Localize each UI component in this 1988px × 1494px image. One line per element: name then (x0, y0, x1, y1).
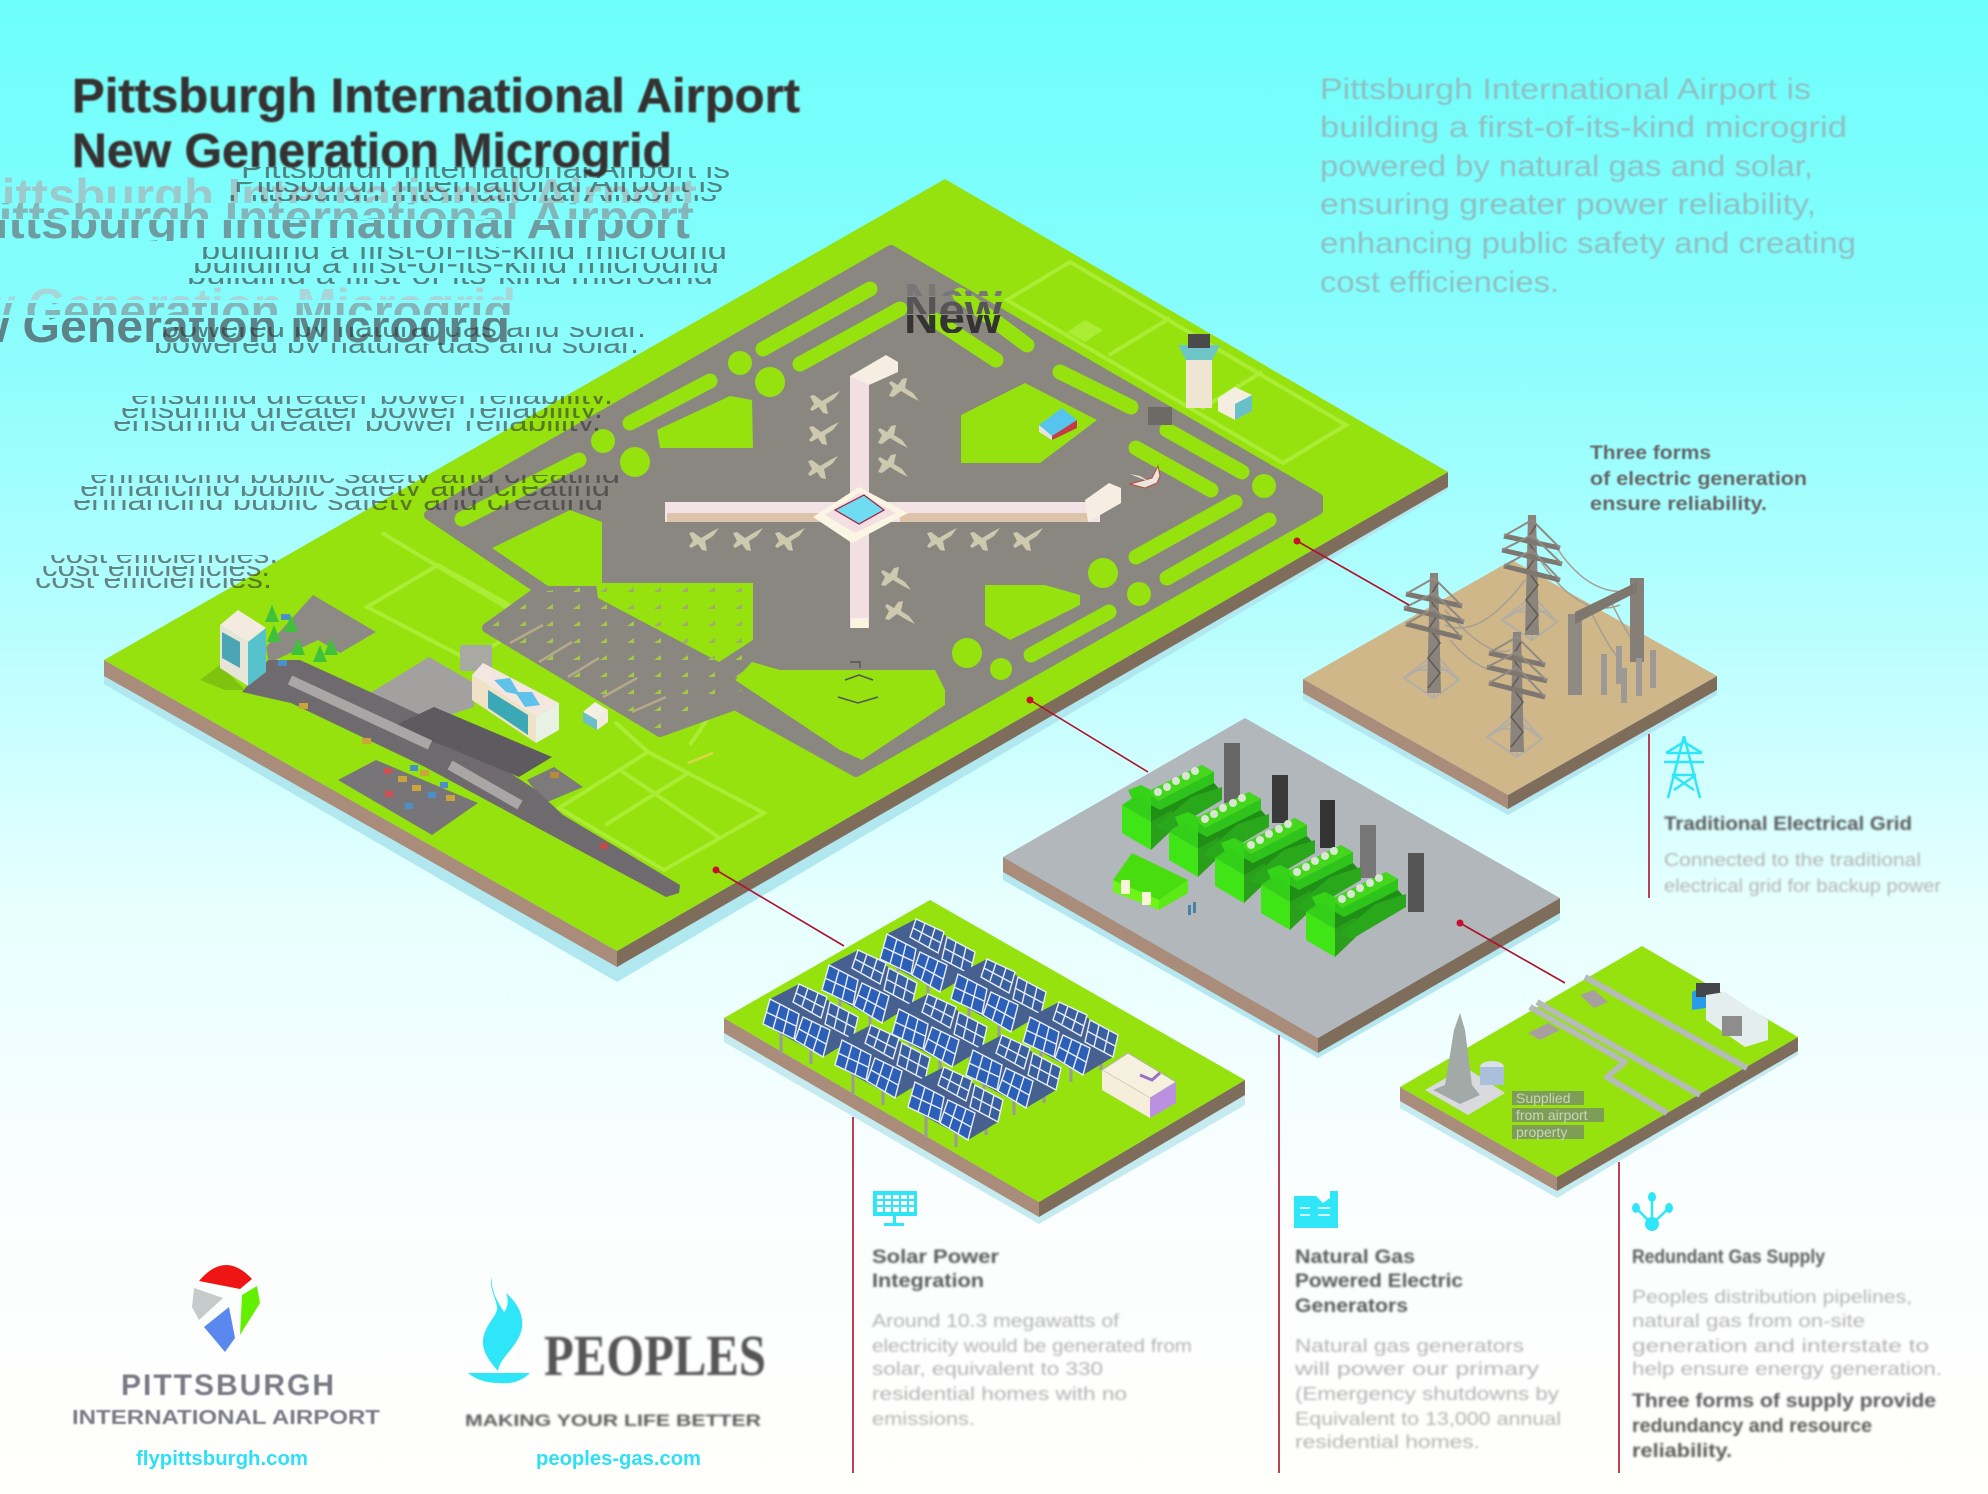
text: natural gas generators: (Emergency shutdowns by (1295, 1384, 1559, 1404)
left overprinted ghost body text: powered by natural gas and solar, (154, 328, 639, 360)
intro text top right (1320, 73, 1856, 299)
workers (1188, 902, 1196, 915)
label: supplied from airport property: property (1516, 1124, 1567, 1140)
logo: Peoples: PEOPLES (544, 1323, 766, 1388)
left overprinted ghost body text: building a first-of-its-kind microgrid (187, 259, 713, 291)
ground side roads and parking (242, 595, 680, 897)
green control building (1113, 853, 1188, 910)
text: natural gas generators: residential homes. (1295, 1432, 1480, 1452)
icon: generator (1294, 1191, 1338, 1228)
overprinted ghost word on airfield: New (904, 275, 1003, 324)
panel: main airport platform (104, 179, 1448, 982)
left overprinted ghost body text: enhancing public safety and creating (90, 458, 620, 490)
text: redundant supply: generation and interstate to (1632, 1336, 1929, 1356)
substation gantry (1568, 578, 1653, 703)
text: redundant supply: Peoples distribution pipelines, (1632, 1287, 1912, 1307)
left overprinted ghost body text: enhancing public safety and creating (73, 485, 603, 517)
logo: Pittsburgh International Airport (72, 1265, 380, 1470)
left overprinted ghost body text: building a first-of-its-kind microgrid (193, 248, 719, 280)
icon: transmission tower (1664, 736, 1704, 798)
text: redundant supply (1632, 1247, 1942, 1462)
trees (265, 605, 338, 662)
generators (1122, 765, 1406, 957)
connector lines (712, 538, 1649, 1473)
text: natural gas generators: will power our primary (1294, 1359, 1539, 1379)
tanker truck (1692, 983, 1768, 1047)
intro text top right: Pittsburgh International Airport is (1320, 73, 1811, 106)
text: solar power integration: Integration (872, 1271, 984, 1292)
text: redundant supply: Three forms of supply provide (1632, 1391, 1936, 1412)
text: solar power integration: Solar Power (872, 1247, 1000, 1268)
panel: generator platform (1003, 718, 1560, 1058)
left overprinted ghost body text: building a first-of-its-kind microgrid (201, 234, 727, 266)
text: natural gas generators: Powered Electric (1295, 1271, 1463, 1292)
label: supplied from airport property: Supplied (1516, 1090, 1570, 1106)
left overprinted ghost body text: enhancing public safety and creating (80, 471, 610, 503)
overprint marks near south apron (838, 662, 878, 703)
left overprinted ghost body text: cost efficiencies. (42, 551, 270, 583)
text: traditional electrical grid: Connected to the traditional (1664, 850, 1921, 870)
text: natural gas generators: Natural Gas (1295, 1247, 1415, 1268)
left overprinted ghost body text: cost efficiencies. (50, 538, 278, 570)
text: solar power integration: electricity would be generated from (872, 1336, 1192, 1356)
callout: three forms of generation: Three forms (1590, 443, 1711, 464)
logo: Peoples (465, 1276, 766, 1470)
terminal building (460, 645, 559, 743)
logo: Pittsburgh International Airport: flypittsburgh.com (136, 1448, 308, 1470)
intro text top right: building a first-of-its-kind microgrid (1320, 111, 1847, 144)
left overprinted ghost body text: Pittsburgh International Airport is (228, 176, 717, 208)
text: solar power integration: solar, equivalent to 330 (872, 1359, 1103, 1379)
text: redundant supply: Redundant Gas Supply (1632, 1247, 1825, 1268)
text: redundant supply: reliability. (1632, 1441, 1732, 1462)
logo: Pittsburgh International Airport: INTERNATIONAL AIRPORT (72, 1407, 380, 1429)
left overprinted ghost headline (0, 169, 697, 352)
text: traditional electrical grid (1664, 814, 1941, 896)
logo: Peoples: peoples-gas.com (536, 1448, 701, 1470)
inverter building (1102, 1053, 1176, 1118)
intro text top right: ensuring greater power reliability, (1320, 188, 1816, 221)
text: natural gas generators: Generators (1295, 1296, 1408, 1317)
overprinted ghost word on airfield: New (904, 294, 1003, 343)
cars (278, 614, 608, 849)
left overprinted ghost body text (35, 153, 730, 595)
text: traditional electrical grid: Traditional Electrical Grid (1664, 814, 1912, 835)
intro text top right: cost efficiencies. (1320, 266, 1559, 299)
grass islands (492, 351, 1276, 760)
exhaust stacks (1224, 743, 1424, 912)
label: supplied from airport property (1512, 1090, 1604, 1140)
apron and taxiways (429, 250, 1318, 772)
left overprinted ghost body text: cost efficiencies. (35, 563, 272, 595)
panel: transmission platform (1303, 515, 1717, 815)
hangar (1039, 408, 1077, 440)
text: natural gas generators: Natural gas generators (1295, 1336, 1524, 1356)
pipe pads (1528, 990, 1608, 1040)
hatched gates area (483, 585, 770, 733)
text: redundant supply: natural gas from on-site (1632, 1311, 1865, 1331)
left overprinted ghost body text: ensuring greater power reliability, (113, 406, 601, 438)
left overprinted ghost body text: Pittsburgh International Airport is (241, 153, 730, 185)
callout: three forms of generation: of electric generation (1590, 469, 1807, 490)
runway markings (510, 625, 666, 712)
small tower building (1218, 387, 1252, 420)
overhead wires (1445, 545, 1640, 671)
storage tank (1480, 1061, 1504, 1085)
utility box (583, 702, 608, 730)
label: supplied from airport property: from airport (1516, 1107, 1588, 1123)
panel: gas supply platform (1400, 946, 1798, 1198)
text: redundant supply: redundancy and resource (1632, 1416, 1872, 1437)
text: solar power integration (872, 1247, 1192, 1429)
parked planes (689, 378, 1043, 624)
pipelines (1530, 977, 1747, 1113)
lattice towers (1404, 515, 1562, 757)
panel: solar platform (724, 900, 1245, 1224)
intro text top right: powered by natural gas and solar, (1320, 150, 1813, 183)
red-tail plane (1130, 466, 1160, 488)
field markings (367, 262, 1346, 870)
text: natural gas generators (1294, 1247, 1561, 1452)
title: New Generation Microgrid (72, 125, 672, 178)
logo: Peoples: MAKING YOUR LIFE BETTER (465, 1411, 761, 1430)
left overprinted ghost body text: ensuring greater power reliability, (121, 393, 603, 425)
overprinted ghost word on airfield (904, 275, 1003, 343)
intro text top right: enhancing public safety and creating (1320, 227, 1856, 260)
logo: Pittsburgh International Airport: PITTSBURGH (121, 1369, 334, 1402)
icon: solar panel (873, 1191, 917, 1226)
hotel building (200, 610, 266, 690)
icon: branching supply (1632, 1192, 1673, 1231)
callout: three forms of generation: ensure reliability. (1590, 494, 1767, 515)
solar arrays (763, 919, 1118, 1147)
control tower (1148, 334, 1220, 425)
text: natural gas generators: Equivalent to 13,000 annual (1295, 1409, 1561, 1429)
left overprinted ghost body text: ensuring greater power reliability, (131, 379, 613, 411)
title (72, 70, 800, 178)
callout: three forms of generation (1590, 443, 1807, 515)
overprinted ghost word on airfield: New (904, 286, 1003, 335)
well structure (1425, 1013, 1505, 1115)
text: solar power integration: residential homes with no (872, 1384, 1127, 1404)
text: redundant supply: help ensure energy generation. (1632, 1359, 1942, 1379)
left overprinted ghost body text: Pittsburgh International Airport is (234, 167, 723, 199)
title: Pittsburgh International Airport (72, 70, 800, 123)
hatch overprint on grass (596, 583, 753, 662)
text: solar power integration: Around 10.3 megawatts of (872, 1311, 1120, 1331)
left overprinted ghost body text: powered by natural gas and solar, (161, 312, 646, 344)
text: traditional electrical grid: electrical grid for backup power (1664, 876, 1941, 896)
text: solar power integration: emissions. (872, 1409, 975, 1429)
terminal cross (665, 355, 1121, 628)
